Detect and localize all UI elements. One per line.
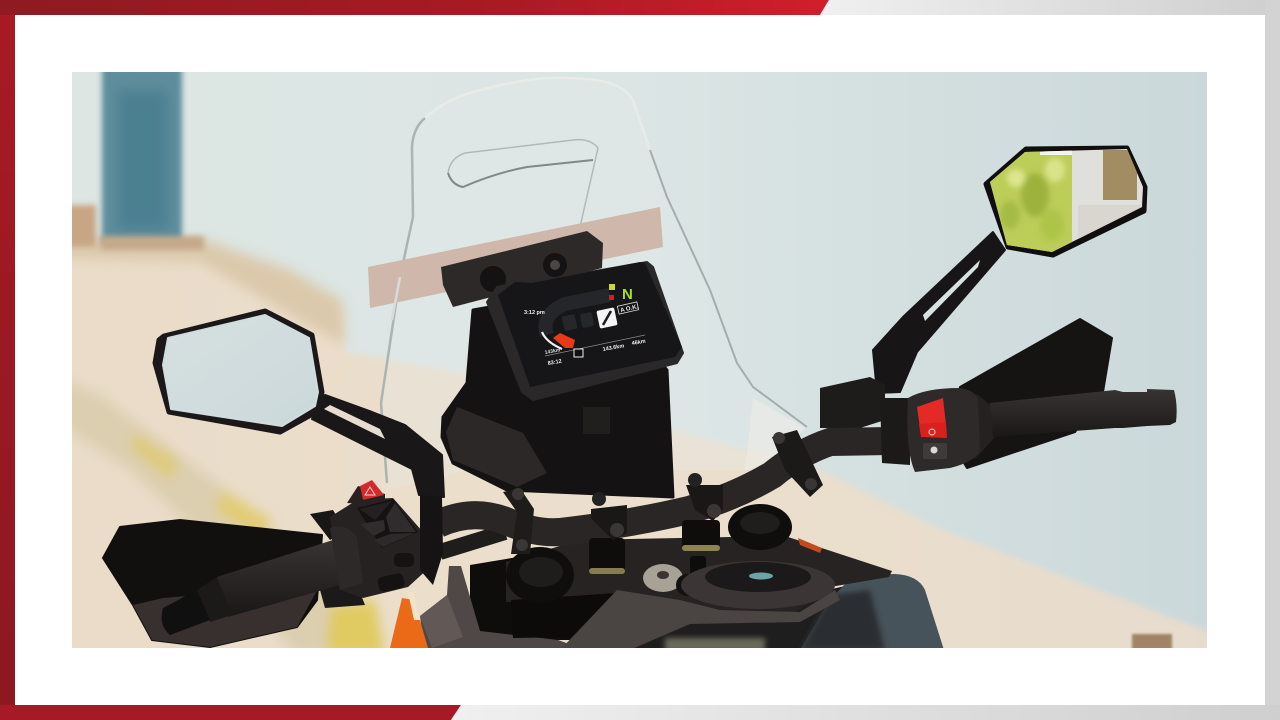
left mirror stalk	[312, 395, 444, 497]
right perch	[880, 398, 910, 465]
handlebar	[438, 430, 890, 574]
rev arc white	[542, 332, 562, 349]
lever behind	[310, 510, 345, 540]
status icon red	[609, 295, 614, 300]
windscreen tip highlight	[748, 398, 804, 456]
clamp centre left	[591, 492, 627, 540]
cowl side panel	[446, 407, 547, 487]
right handguard	[950, 319, 1112, 468]
grey left panel	[420, 566, 600, 655]
key barrel	[676, 574, 698, 596]
right mirror glass	[985, 145, 1150, 260]
tank reflection	[665, 638, 765, 652]
mirror top highlight	[1040, 148, 1072, 155]
fuel cap surround	[681, 561, 835, 609]
clamp far right	[772, 430, 823, 497]
nav down button	[374, 533, 415, 547]
left switchgear	[310, 480, 430, 608]
display bracket	[441, 231, 603, 307]
hazard base	[347, 486, 385, 505]
right switchgear	[880, 388, 994, 472]
range readout: 143km	[544, 347, 561, 356]
dash cowl	[442, 300, 673, 497]
orange fairing	[390, 592, 428, 648]
left mirror stalk slot	[324, 405, 385, 439]
frame: grey top band	[820, 0, 1280, 15]
right mirror stalk	[873, 232, 1005, 393]
nav icon	[574, 349, 583, 357]
ignition nut	[643, 564, 683, 592]
windscreen handle cutout	[448, 140, 598, 227]
mirror lower wall	[1078, 205, 1148, 250]
neutral indicator: N	[622, 286, 633, 303]
hazard glyph	[930, 446, 938, 454]
key	[690, 556, 706, 586]
photo background: tan kerb edge	[60, 240, 345, 345]
photo background: yellow kerb	[60, 378, 385, 655]
mirror brown window	[1103, 150, 1137, 200]
left mirror	[155, 311, 444, 497]
left grip	[162, 526, 363, 635]
OK label	[617, 302, 639, 315]
bar end cap	[162, 590, 210, 635]
clock: 3:12 pm	[524, 310, 545, 316]
left handguard lower	[133, 585, 320, 647]
left clamp and mirror base	[420, 495, 443, 585]
left knob	[506, 547, 574, 603]
grip flange	[330, 526, 363, 590]
hazard switch	[360, 480, 384, 500]
gear badge	[596, 307, 618, 329]
right mirror stalk slot	[923, 260, 980, 321]
upper switch button	[394, 553, 414, 567]
right grip	[990, 389, 1177, 437]
lower switch button	[377, 572, 405, 593]
trip time readout: 83:12	[547, 359, 562, 367]
lower lever	[320, 580, 365, 608]
display bezel	[498, 262, 682, 387]
cowl tab	[583, 407, 610, 434]
windscreen left edge	[381, 118, 425, 483]
handlebar tube	[438, 441, 890, 532]
nav pad	[357, 499, 418, 548]
left mirror glass	[163, 315, 318, 426]
grey collar band	[560, 590, 840, 652]
orange accent	[798, 538, 822, 553]
photo background: wall	[72, 72, 1207, 648]
start glyph	[929, 429, 935, 435]
fuel cap	[705, 562, 811, 592]
mirror wall reflection	[985, 145, 1150, 260]
frame: red top band	[0, 0, 829, 15]
rev arc red	[553, 333, 575, 348]
start switch red	[919, 422, 947, 438]
photo background: teal door	[72, 72, 207, 252]
left riser	[589, 538, 625, 574]
tank mid	[600, 586, 880, 655]
windscreen right edge	[650, 150, 807, 427]
photo background: distant brown block	[1132, 634, 1172, 650]
right switch housing	[907, 388, 980, 472]
TFT display	[487, 262, 683, 400]
photo	[50, 60, 1230, 670]
photo background: ground	[72, 255, 1207, 648]
display housing	[487, 262, 683, 400]
right mirror	[873, 145, 1150, 393]
hazard glyph	[365, 487, 375, 495]
OK label: A O.K.	[620, 304, 639, 314]
ghost digit two	[580, 312, 594, 328]
bar end collar	[197, 577, 232, 622]
frame: grey right band	[1265, 0, 1280, 720]
black area below cowl	[470, 540, 620, 640]
console under the bars	[420, 504, 944, 655]
black lower box	[511, 593, 617, 638]
nav up button	[359, 501, 392, 520]
windscreen mount strip	[368, 207, 663, 308]
grey left wedge	[420, 595, 463, 648]
tank dark shade	[800, 590, 885, 650]
nav right button	[386, 503, 416, 532]
status icon yellow	[609, 284, 615, 290]
left mirror housing	[155, 311, 322, 432]
right collar	[965, 392, 994, 460]
kill switch red	[917, 398, 946, 428]
nav left button	[360, 520, 385, 536]
right knob	[728, 504, 792, 550]
frame: red left band	[0, 0, 15, 720]
left handguard	[103, 520, 322, 647]
windscreen	[380, 78, 807, 490]
frame: grey bottom band	[451, 705, 1280, 720]
foliage dark patches	[1000, 158, 1065, 241]
ghost digit one	[562, 314, 577, 331]
clamp left	[503, 488, 534, 554]
windscreen left edge over strip	[392, 277, 400, 320]
speedo arc	[545, 295, 610, 335]
lower left cable tube	[440, 532, 505, 552]
frame: red bottom band	[0, 705, 461, 720]
clamp centre right	[686, 473, 723, 521]
right mirror housing	[986, 148, 1145, 255]
trip distance readout: 143.6km	[602, 343, 625, 353]
average speed readout: 46km	[631, 339, 646, 347]
mirror foliage	[985, 145, 1072, 260]
right riser	[682, 520, 720, 551]
top plate	[506, 536, 892, 622]
fuel cap emblem	[749, 572, 773, 580]
info divider	[545, 335, 645, 356]
left switch housing	[330, 498, 430, 598]
brake reservoir	[820, 377, 885, 428]
hazard button	[923, 443, 947, 459]
tank right shoulder	[800, 574, 944, 650]
grip rubber	[217, 540, 347, 617]
windscreen top edge	[425, 78, 650, 150]
